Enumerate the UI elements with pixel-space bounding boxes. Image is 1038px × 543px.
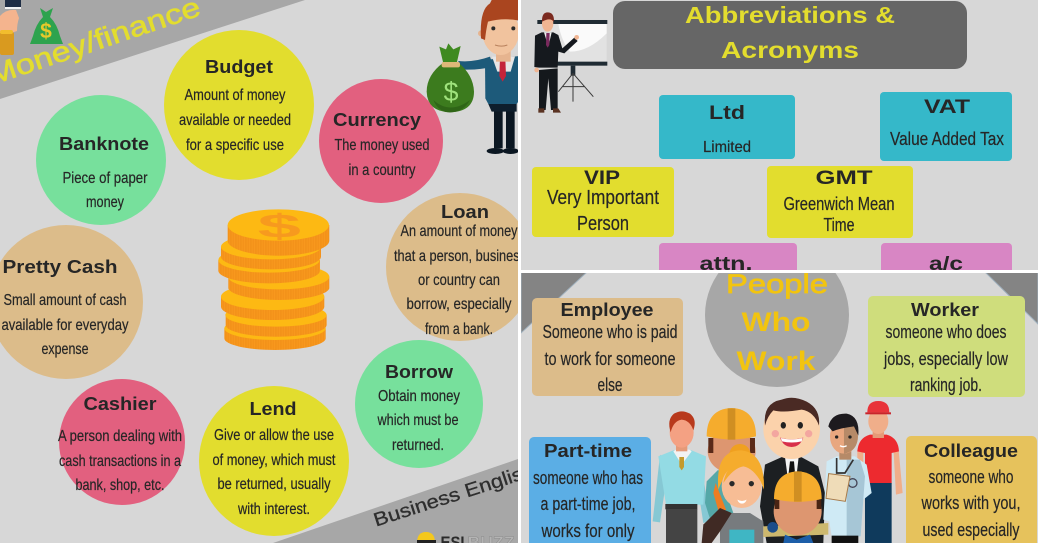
circle: Borrow	[355, 340, 483, 468]
circle: Loan: Loan	[441, 202, 489, 222]
box: VIP	[532, 167, 674, 237]
title box: Abbreviations &	[685, 2, 895, 28]
circle: Loan: that a person, business	[394, 248, 526, 265]
box: Colleague: someone who	[928, 467, 1014, 487]
circle: Cashier: Cashier	[84, 394, 156, 414]
title circle: People	[726, 269, 828, 299]
box: VAT	[880, 92, 1012, 161]
box: attn	[659, 243, 797, 283]
box: VIP: Person	[577, 213, 629, 235]
box: GMT: Time	[824, 215, 854, 235]
box: GMT: GMT	[816, 168, 873, 189]
box: attn: attn.	[700, 254, 752, 275]
figure: woman with blonde hair	[702, 444, 764, 543]
circle: Cashier	[58, 379, 185, 505]
figure: construction worker behind	[705, 408, 756, 530]
box: VAT: Value Added Tax	[890, 129, 1004, 149]
box: Worker	[868, 296, 1025, 397]
circle: Loan: or country can	[418, 272, 500, 289]
circle: Budget: available or needed	[179, 112, 291, 129]
circle: Lend: Give or allow the use	[214, 427, 334, 444]
panel: people who work	[521, 243, 1038, 543]
figure: man in red shirt	[857, 401, 903, 543]
figure: front construction worker	[763, 471, 828, 543]
circle: Currency	[319, 79, 443, 203]
box: VIP: VIP	[584, 168, 620, 189]
icon: businessman with money bag	[427, 0, 519, 154]
circle: Lend: be returned, usually	[218, 476, 330, 493]
box: Employee	[532, 298, 683, 396]
box: Employee: Employee	[560, 300, 654, 320]
circle: Borrow: which must be	[377, 412, 459, 429]
circle: Lend: of money, which must	[212, 452, 336, 469]
illustration: group of workers	[653, 398, 903, 543]
icon: green money bag: $	[40, 20, 52, 43]
box: Employee: else	[598, 375, 622, 395]
box: Part-time: someone who has	[533, 468, 643, 488]
circle: Cashier: bank, shop, etc.	[76, 477, 164, 494]
icon: green money bag	[30, 8, 63, 44]
circle: Pretty Cash: expense	[42, 341, 89, 358]
circle: Banknote: Piece of paper	[62, 170, 148, 187]
box: Colleague: Colleague	[924, 441, 1018, 461]
circle: Loan: borrow, especially	[406, 296, 512, 313]
title box	[613, 1, 967, 69]
box: a/c	[881, 243, 1012, 283]
figure: doctor	[823, 414, 872, 543]
circle: Borrow: Obtain money	[378, 388, 460, 405]
icon: businessman with money bag: $	[444, 77, 459, 107]
box: Worker: someone who does	[886, 322, 1006, 342]
box: VAT: VAT	[924, 97, 971, 118]
title box: Acronyms	[721, 37, 859, 63]
box: Ltd	[659, 95, 795, 159]
box: Ltd: Limited	[703, 139, 751, 156]
panel: money and finance	[0, 0, 538, 543]
box: Part-time: Part-time	[544, 441, 632, 461]
box: VIP: Very Important	[547, 187, 659, 209]
circle: Borrow: returned.	[392, 437, 444, 454]
box: Part-time	[529, 437, 651, 543]
circle: Budget: Amount of money	[184, 87, 286, 104]
box: Worker: Worker	[911, 300, 979, 320]
bottom banner: Business English	[273, 459, 538, 543]
circle: Banknote: money	[86, 194, 124, 211]
title banner	[0, 0, 305, 99]
circle: Lend	[199, 386, 349, 536]
figure: man in blue sweater	[653, 411, 710, 543]
circle: Budget	[164, 30, 314, 180]
box: Worker: ranking job.	[910, 375, 982, 395]
circle: Pretty Cash	[0, 225, 143, 379]
circle: Loan: An amount of money	[400, 223, 518, 240]
circle: Banknote	[36, 95, 166, 225]
circle: Pretty Cash: Pretty Cash	[2, 257, 117, 277]
title circle	[705, 273, 849, 387]
title circle: Who	[742, 307, 810, 337]
circle: Currency: Currency	[333, 110, 421, 130]
circle: Loan	[386, 193, 534, 341]
box: Worker: jobs, especially low	[883, 349, 1009, 369]
box: GMT	[767, 166, 913, 238]
box: Part-time: a part-time job,	[540, 494, 636, 514]
box: Part-time: works for only	[541, 521, 634, 541]
circle: Budget: Budget	[205, 57, 273, 77]
circle: Cashier: A person dealing with	[58, 428, 182, 445]
panel: abbreviations and acronyms	[521, 0, 1038, 283]
box: Employee: to work for someone	[544, 349, 676, 369]
icon: coin stack	[218, 208, 329, 350]
corner decoration right	[985, 272, 1038, 324]
box: Colleague	[906, 436, 1037, 543]
circle: Borrow: Borrow	[385, 362, 454, 382]
icon: hand holding coins	[0, 0, 21, 55]
bottom banner: Business English: Business English	[371, 460, 538, 531]
box: Employee: Someone who is paid	[542, 322, 678, 342]
dividers	[518, 0, 1038, 543]
figure: smiling man in suit	[760, 398, 825, 543]
circle: Currency: in a country	[348, 162, 416, 179]
circle: Budget: for a specific use	[186, 137, 284, 154]
icon: coin stack: $	[258, 208, 302, 245]
circle: Cashier: cash transactions in a	[59, 453, 181, 470]
icon: presenter at projection screen	[534, 12, 607, 113]
box: Ltd: Ltd	[709, 103, 745, 124]
circle: Pretty Cash: Small amount of cash	[4, 292, 127, 309]
circle: Lend: Lend	[250, 399, 296, 419]
circle: Lend: with interest.	[237, 501, 310, 518]
corner decoration left	[521, 272, 587, 333]
circle: Loan: from a bank.	[425, 321, 493, 338]
title circle: Work	[736, 346, 817, 376]
box: GMT: Greenwich Mean	[784, 194, 894, 214]
box: a/c: a/c	[929, 254, 964, 275]
circle: Currency: The money used	[334, 137, 430, 154]
circle: Pretty Cash: available for everyday	[2, 317, 128, 334]
logo: ESL Buzz	[417, 532, 514, 543]
circle: Banknote: Banknote	[59, 134, 149, 154]
